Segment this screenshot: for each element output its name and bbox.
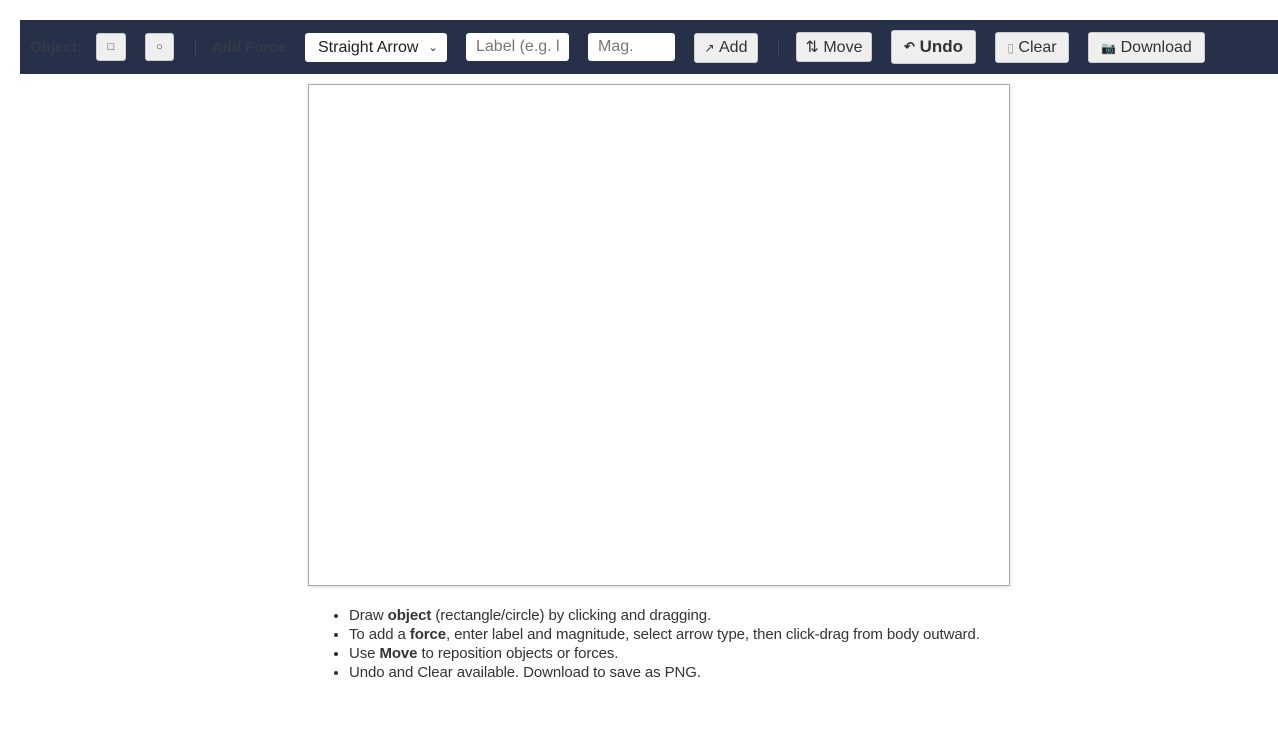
button: Add	[694, 33, 758, 63]
select: arrow type: ⌄	[428, 42, 438, 54]
button: Move	[796, 32, 872, 62]
instructions list: Undo and Clear available. Download to save as PNG.	[349, 664, 701, 681]
button: circle	[145, 33, 174, 61]
instructions list	[334, 607, 980, 681]
input: label	[466, 33, 569, 61]
button: Download: 📷	[1101, 40, 1116, 54]
button: Download: Download	[1121, 38, 1192, 56]
button: Undo	[891, 30, 976, 64]
button: Add: ↗	[704, 41, 715, 55]
input: label: Label (e.g. l	[476, 38, 560, 55]
instructions list: Use Move to reposition objects or forces.	[349, 645, 618, 662]
button: Download	[1088, 32, 1205, 63]
button: Add: Add	[719, 39, 747, 56]
button: rectangle: □	[108, 41, 114, 53]
input: magnitude	[588, 33, 675, 61]
button: Undo: Undo	[920, 37, 963, 56]
label: Object: Object:	[30, 39, 82, 56]
button: Clear: ▯	[1007, 40, 1014, 54]
input: magnitude: Mag.	[598, 38, 634, 55]
label: Add Force: Add Force:	[212, 39, 291, 56]
button: Clear	[995, 32, 1069, 63]
canvas	[308, 84, 1010, 586]
toolbar	[20, 20, 1278, 74]
instructions list: To add a force, enter label and magnitude, select arrow type, then click-drag from body outward.	[349, 626, 980, 643]
instructions list: Draw object (rectangle/circle) by clicking and dragging.	[349, 607, 711, 624]
button: Undo: ↶	[904, 39, 915, 54]
button: Move: ⇅ Move	[806, 39, 862, 56]
select: arrow type: Straight Arrow	[318, 38, 418, 56]
select: arrow type	[305, 33, 447, 62]
button: circle: ○	[156, 41, 163, 53]
button: rectangle	[96, 33, 126, 61]
button: Clear: Clear	[1018, 38, 1057, 56]
